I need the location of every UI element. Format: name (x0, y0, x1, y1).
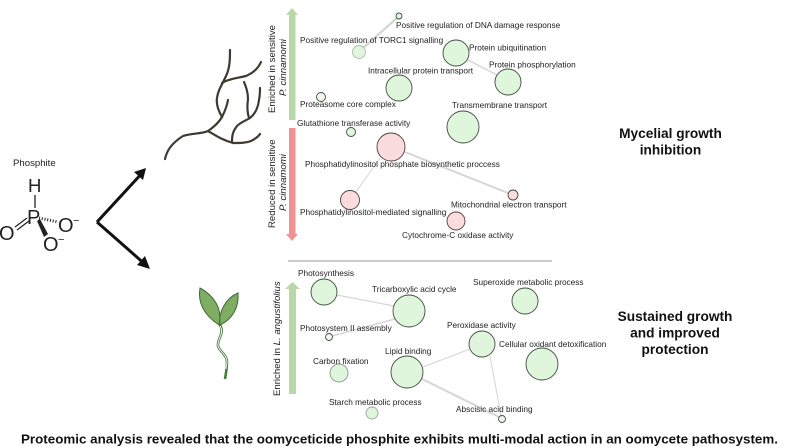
network: plant enriched: Photosystem II assembly (300, 324, 393, 333)
axis: reduced in sensitive P. cinnamomi: Reduced in sensitive (267, 139, 278, 228)
icon: phosphite molecule: H (28, 175, 41, 196)
arrow: to seedling (97, 222, 150, 269)
icon: phosphite molecule (0, 175, 79, 256)
heading: sustained growth and improved protection: Sustained growth (618, 309, 732, 324)
network: mycelial reduced: Phosphatidylinositol-mediated signalling (300, 208, 447, 217)
axis: enriched in sensitive P. cinnamomi (267, 8, 298, 120)
network: mycelial reduced: Mitochondrial electron transport (451, 200, 567, 210)
axis: enriched in sensitive P. cinnamomi: Enriched in sensitive (267, 25, 278, 113)
network: plant enriched: Tricarboxylic acid cycle (372, 285, 457, 294)
network: plant enriched: Peroxidase activity (447, 321, 517, 330)
network: plant enriched: Superoxide metabolic process (473, 278, 584, 287)
network: mycelial enriched (297, 13, 576, 143)
network: mycelial enriched: Intracellular protein transport (368, 66, 474, 76)
heading: sustained growth and improved protection: and improved (630, 326, 720, 340)
network: mycelial enriched: Protein phosphorylation (489, 60, 576, 70)
arrow: to mycelium (97, 168, 146, 222)
heading: sustained growth and improved protection: protection (642, 342, 708, 357)
heading: mycelial growth inhibition: Mycelial growth (619, 126, 722, 141)
icon: phosphite molecule: P (27, 207, 40, 229)
network: mycelial enriched: Transmembrane transport (452, 101, 548, 110)
icon: phosphite molecule: − (73, 215, 79, 227)
network: plant enriched: Abscisic acid binding (456, 405, 533, 414)
axis: enriched in sensitive P. cinnamomi: P. cinnamomi (278, 38, 289, 96)
icon: mycelium (165, 50, 261, 159)
icon: phosphite molecule: − (58, 234, 64, 246)
axis: reduced in sensitive P. cinnamomi: P. cinnamomi (278, 153, 289, 211)
network: mycelial reduced: Phosphatidylinositol phosphate biosynthetic proccess (305, 160, 500, 169)
network: mycelial reduced (300, 133, 567, 240)
label: Phosphite: Phosphite (13, 158, 56, 169)
network: mycelial reduced: Cytochrome-C oxidase activity (402, 231, 514, 240)
network: plant enriched: Cellular oxidant detoxification (499, 340, 607, 349)
axis: enriched in L. angustifolius: Enriched in L. angustifolius (272, 281, 283, 396)
network: plant enriched: Carbon fixation (313, 357, 369, 366)
network: plant enriched: Lipid binding (385, 347, 432, 356)
axis: enriched in L. angustifolius (272, 281, 300, 396)
icon: phosphite molecule: O (43, 234, 59, 256)
network: mycelial enriched: Positive regulation of TORC1 signalling (300, 36, 444, 45)
network: mycelial enriched: Proteasome core complex (300, 100, 397, 109)
divider line (288, 260, 552, 262)
axis: reduced in sensitive P. cinnamomi (267, 128, 298, 241)
network: mycelial enriched: Positive regulation of DNA damage response (396, 21, 561, 30)
network: mycelial enriched: Glutathione transferase activity (297, 119, 411, 128)
icon: phosphite molecule: O (58, 215, 74, 237)
network: plant enriched: Photosynthesis (298, 269, 354, 278)
network: plant enriched (298, 269, 607, 422)
caption: Proteomic analysis revealed that the oomyceticide phosphite exhibits multi-modal action in an oomycete pathosystem. (21, 432, 778, 446)
network: plant enriched: Starch metabolic process (329, 398, 422, 407)
network: mycelial enriched: Protein ubiquitination (469, 44, 546, 52)
heading: mycelial growth inhibition: inhibition (640, 142, 701, 158)
icon: seedling (199, 288, 238, 379)
